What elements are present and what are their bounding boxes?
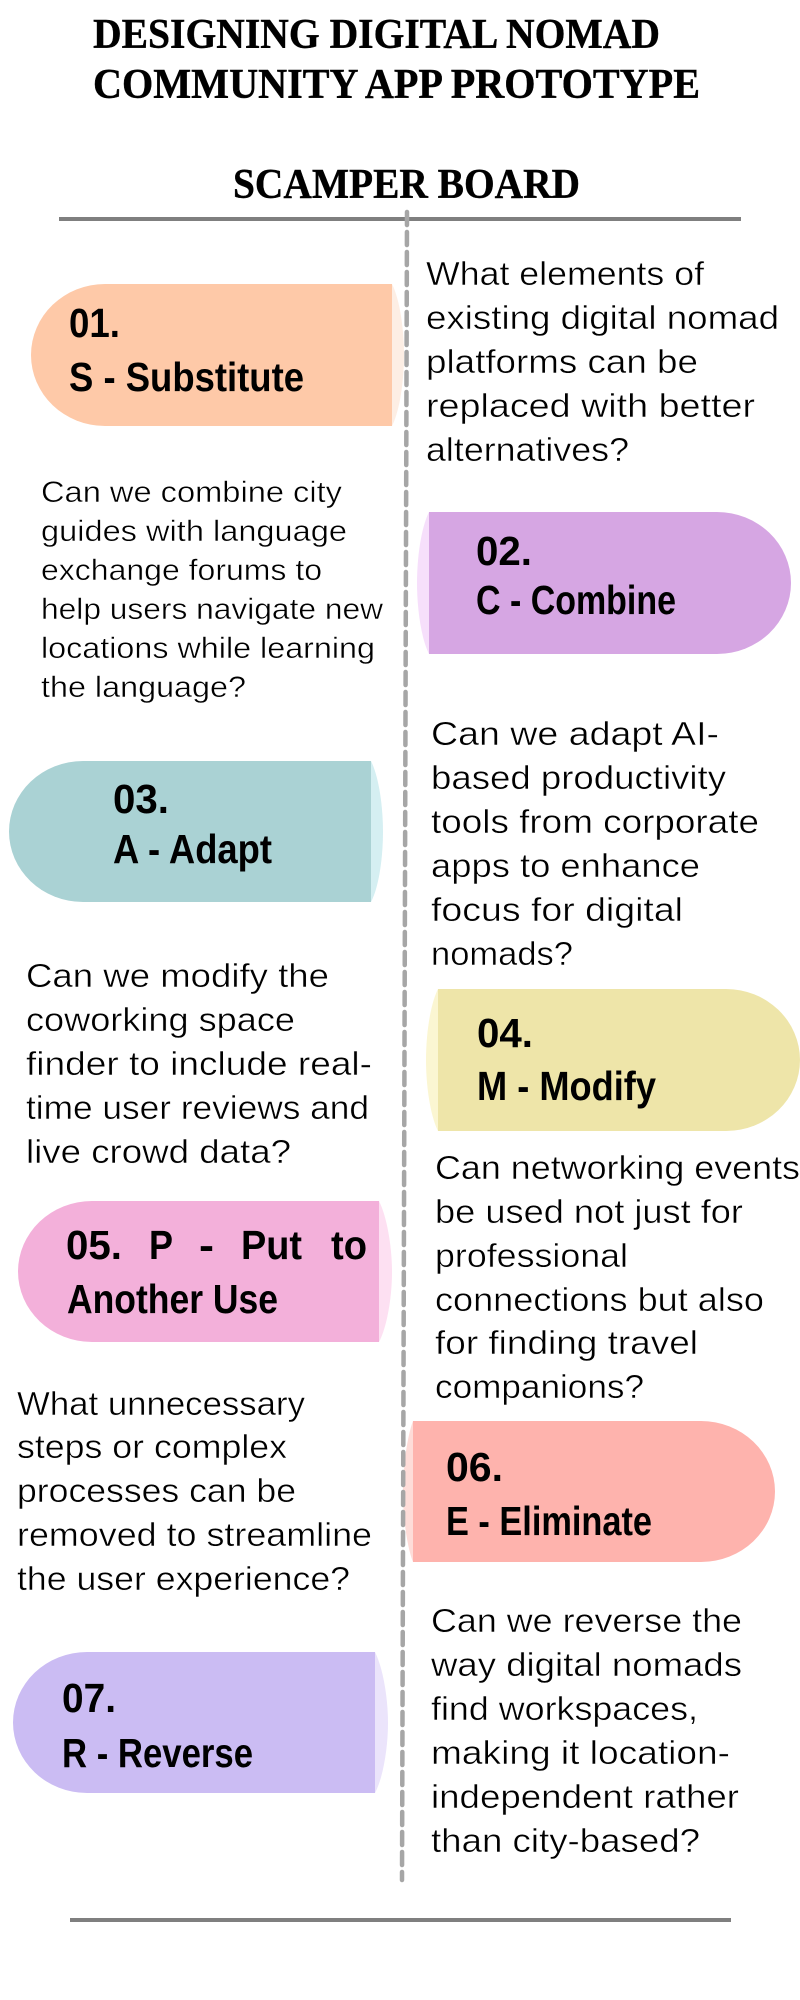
card 05: put to another use: P (149, 1222, 173, 1268)
text: put to another use question (435, 1149, 800, 1405)
card 05: put to another use: - (199, 1222, 214, 1268)
card 04: modify: M - Modify (477, 1063, 656, 1109)
text: reverse question: than city-based? (431, 1822, 700, 1859)
text: adapt question: apps to enhance (431, 847, 700, 884)
text: put to another use question: be used not just for (435, 1193, 743, 1230)
text: substitute question: existing digital nomad (426, 299, 779, 336)
card 04: modify: 04. (477, 1010, 533, 1056)
text: adapt question: focus for digital (431, 891, 683, 928)
text: combine question: the language? (41, 671, 246, 704)
card 01: substitute: 01. (69, 300, 120, 346)
card 05: put to another use: Put (241, 1222, 302, 1268)
text: eliminate question (17, 1385, 372, 1597)
text: eliminate question: removed to streamline (17, 1516, 372, 1553)
card 07: reverse (13, 1652, 388, 1793)
card 03: adapt (9, 761, 383, 902)
title: DESIGNING DIGITAL NOMAD (93, 12, 660, 58)
card 04: modify (426, 989, 800, 1131)
text: reverse question: making it location- (431, 1734, 730, 1771)
text: substitute question (426, 255, 779, 468)
text: put to another use question: companions? (435, 1368, 644, 1405)
card 03: adapt: A - Adapt (113, 826, 272, 872)
text: combine question: Can we combine city (41, 476, 342, 509)
card 07: reverse: 07. (62, 1675, 116, 1721)
card 03: adapt: 03. (113, 776, 169, 822)
text: combine question: guides with language (41, 515, 347, 548)
card 05: put to another use: 05. (66, 1222, 122, 1268)
text: modify question: Can we modify the (26, 957, 329, 994)
text: modify question: finder to include real- (26, 1045, 372, 1082)
text: modify question (26, 957, 372, 1170)
heading: scamper board: SCAMPER BOARD (233, 162, 580, 208)
text: put to another use question: Can networking events (435, 1149, 800, 1186)
text: combine question: exchange forums to (41, 554, 322, 587)
text: adapt question: nomads? (431, 935, 573, 972)
title: COMMUNITY APP PROTOTYPE (93, 62, 700, 108)
card 06: eliminate (403, 1421, 775, 1562)
text: reverse question: way digital nomads (430, 1646, 742, 1683)
text: modify question: coworking space (26, 1001, 295, 1038)
text: put to another use question: for finding travel (435, 1324, 698, 1361)
text: eliminate question: What unnecessary (17, 1385, 306, 1422)
text: substitute question: alternatives? (426, 431, 629, 468)
text: combine question: locations while learning (41, 632, 375, 665)
card 02: combine: C - Combine (476, 577, 676, 623)
card 05: put to another use (18, 1201, 392, 1342)
text: substitute question: platforms can be (426, 343, 698, 380)
text: reverse question: find workspaces, (431, 1690, 698, 1727)
text: combine question: help users navigate new (41, 593, 383, 626)
card 01: substitute: S - Substitute (69, 354, 304, 400)
card 06: eliminate: E - Eliminate (446, 1498, 652, 1544)
text: modify question: time user reviews and (26, 1089, 369, 1126)
text: modify question: live crowd data? (26, 1133, 291, 1170)
text: reverse question (430, 1602, 742, 1859)
text: adapt question: tools from corporate (431, 803, 759, 840)
card 02: combine: 02. (476, 528, 532, 574)
card 06: eliminate: 06. (446, 1444, 503, 1490)
text: eliminate question: steps or complex (17, 1428, 288, 1465)
text: eliminate question: processes can be (17, 1472, 296, 1509)
card 05: put to another use: Another Use (67, 1276, 278, 1322)
text: combine question (41, 476, 383, 704)
title (93, 12, 700, 108)
text: eliminate question: the user experience? (17, 1560, 350, 1597)
card 07: reverse: R - Reverse (62, 1730, 253, 1776)
text: adapt question: Can we adapt AI- (431, 715, 719, 752)
text: put to another use question: connections but also (435, 1281, 764, 1318)
card 05: put to another use: to (331, 1222, 367, 1268)
text: put to another use question: professional (435, 1237, 628, 1274)
text: reverse question: Can we reverse the (431, 1602, 742, 1639)
text: substitute question: replaced with better (426, 387, 755, 424)
card 01: substitute (31, 284, 404, 426)
text: reverse question: independent rather (431, 1778, 739, 1815)
text: adapt question: based productivity (431, 759, 727, 796)
text: adapt question (431, 715, 759, 972)
text: substitute question: What elements of (426, 255, 705, 292)
card 02: combine (417, 512, 791, 654)
